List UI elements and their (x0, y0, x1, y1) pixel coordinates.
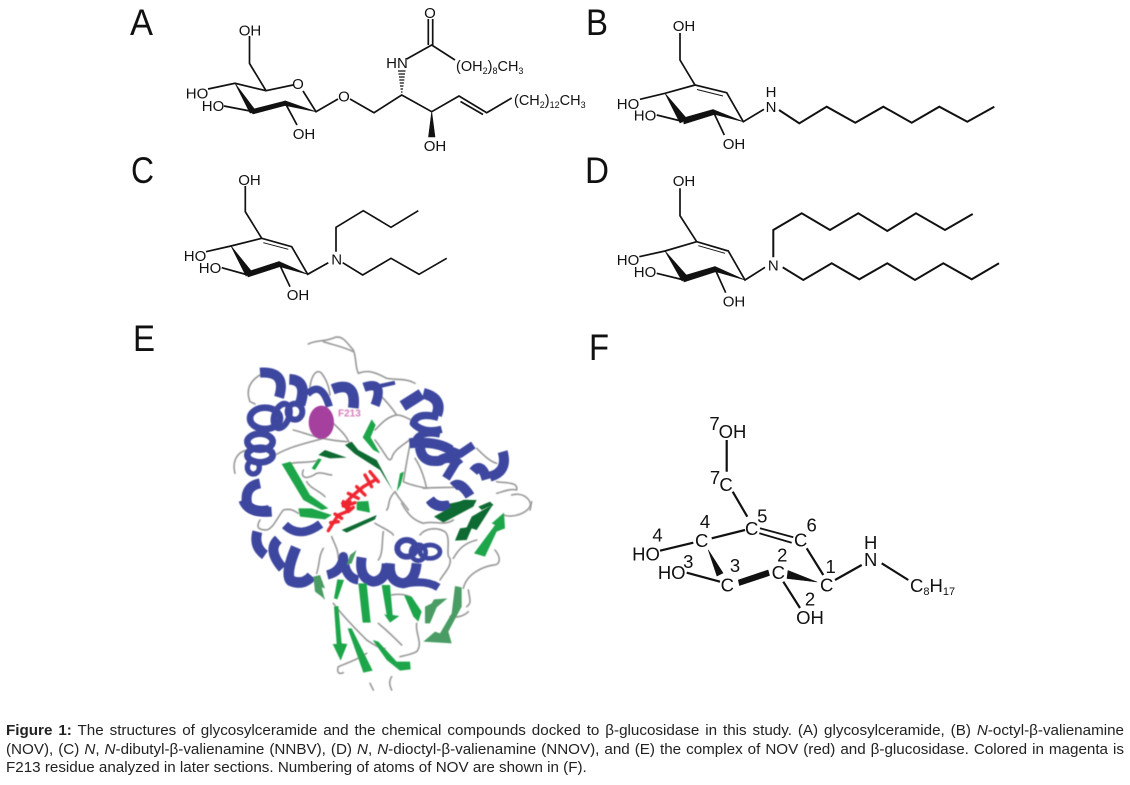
structure A atom labels: HO (202, 98, 224, 115)
structure D bonds (639, 188, 999, 293)
structure F atom labels and numbers: 7 (710, 467, 720, 488)
structure F atom labels and numbers: 2 (805, 588, 815, 610)
structure F atom labels and numbers: H (930, 575, 943, 596)
panel label A: A (130, 2, 153, 43)
panel label B: B (586, 2, 608, 43)
structure C atom labels: OH (238, 172, 261, 189)
panel label F: F (589, 327, 609, 368)
structure C atom labels (184, 172, 342, 304)
green strands, lower (298, 500, 505, 673)
structure F atom labels and numbers: 3 (730, 555, 740, 576)
structure A atom labels: (CH (514, 93, 540, 109)
structure C atom labels: HO (199, 260, 221, 277)
structure D atom labels: HO (617, 252, 639, 269)
structure B atom labels: HO (634, 108, 656, 124)
structure F bonds (660, 440, 908, 608)
structure C bonds (206, 186, 447, 287)
structure F atom labels and numbers: C (719, 474, 733, 495)
structure A atom labels: HO (186, 86, 208, 102)
structure F atom labels and numbers: 6 (807, 514, 817, 536)
structure A atom labels: HN (386, 55, 408, 72)
structure A atom labels: O (292, 76, 304, 93)
structure A atom labels: 3 (581, 100, 586, 110)
structure F atom labels and numbers: OH (796, 607, 824, 628)
structure A atom labels: O (424, 5, 436, 22)
panel E: complex of NOV and beta-glucosidase (133, 318, 532, 690)
structure F atom labels and numbers: HO (658, 562, 686, 583)
gray coils, lower (258, 502, 532, 690)
panel label C: C (131, 150, 154, 191)
structure A atom labels: 3 (518, 66, 523, 76)
protein ribbon, upper part (234, 337, 531, 511)
structure F atom labels and numbers: 5 (757, 506, 767, 526)
structure B atom labels: HO (617, 96, 639, 113)
panel label D: D (585, 150, 609, 191)
structure F atom labels and numbers (632, 413, 955, 628)
structure A atom labels: (OH (456, 59, 483, 75)
structure A atom labels: CH (560, 93, 581, 109)
structure C atom labels: OH (287, 287, 309, 304)
structure A atom labels: ) (488, 59, 492, 75)
panel A: glycosylceramide (130, 2, 586, 155)
structure A atom labels: OH (293, 126, 315, 143)
structure A atom labels: O (338, 88, 350, 106)
caption: F213 residue analyzed in later sections. Numbering of atoms of NOV are shown in (F). (6, 759, 587, 776)
panel C: N,N-dibutyl-beta-valienamine (131, 150, 447, 304)
structure F atom labels and numbers: C (910, 575, 923, 596)
structure F atom labels and numbers: 8 (923, 586, 930, 598)
structure F atom labels and numbers: H (864, 532, 877, 553)
caption: Figure 1: The structures of glycosylceramide and the chemical compounds docked to β-glucosidase in this study. (A) glycosylceramide, (B) N-octyl-β-valienamine (6, 722, 1124, 739)
green strands, upper (282, 419, 493, 510)
structure A atom labels: 12 (550, 100, 560, 110)
structure F atom labels and numbers: N (864, 549, 877, 570)
structure F atom labels and numbers: C (745, 518, 758, 539)
structure D atom labels (617, 173, 779, 310)
structure B atom labels: OH (723, 136, 745, 153)
magenta F213 residue (309, 406, 334, 439)
structure F atom labels and numbers: C (772, 562, 785, 583)
structure A atom labels: 8 (492, 66, 497, 76)
protein ribbon, lower part (243, 500, 532, 690)
structure F atom labels and numbers: 7 (709, 413, 720, 434)
structure F atom labels and numbers: C (721, 574, 734, 596)
structure C atom labels: HO (184, 248, 206, 265)
structure B bonds (640, 33, 994, 135)
structure F atom labels and numbers: 4 (652, 524, 663, 546)
structure D atom labels: OH (723, 294, 745, 310)
structure A atom labels: ) (545, 93, 550, 109)
structure A atom labels: 2 (483, 66, 488, 76)
structure F atom labels and numbers: OH (719, 421, 746, 442)
F213 residue label: F213 (338, 409, 361, 420)
structure F atom labels and numbers: 2 (777, 544, 787, 566)
structure F atom labels and numbers: 4 (700, 511, 710, 532)
structure D atom labels: OH (673, 173, 695, 190)
structure F atom labels and numbers: HO (632, 544, 660, 564)
structure D atom labels: HO (634, 264, 656, 281)
panel B: N-octyl-beta-valienamine (586, 2, 994, 153)
blue helices, lower (243, 500, 450, 587)
red ligand NOV, upper part (343, 472, 378, 508)
caption (6, 722, 1124, 776)
structure C atom labels: N (331, 252, 342, 268)
structure F atom labels and numbers: C (794, 530, 807, 550)
structure F atom labels and numbers: C (695, 530, 708, 551)
structure F atom labels and numbers: 3 (683, 551, 693, 572)
panel F: atom numbering of NOV (589, 327, 955, 628)
panel label E: E (133, 318, 155, 359)
structure B atom labels: H (766, 84, 776, 101)
structure A atom labels: 2 (540, 100, 545, 110)
structure B atom labels: OH (673, 18, 695, 35)
structure A atom labels: CH (497, 59, 518, 75)
structure F atom labels and numbers: C (820, 574, 833, 596)
structure A atom labels: OH (424, 138, 446, 155)
blue helices, upper (247, 373, 504, 511)
structure B atom labels (617, 18, 776, 153)
structure B atom labels: N (766, 99, 776, 116)
structure A bonds (208, 19, 512, 137)
gray coils, upper (234, 337, 531, 510)
structure A atom labels (186, 5, 586, 155)
structure D atom labels: N (768, 258, 779, 274)
structure A atom labels: OH (239, 22, 261, 40)
structure F atom labels and numbers: 17 (943, 586, 955, 598)
caption: (NOV), (C) N, N-dibutyl-β-valienamine (NNBV), (D) N, N-dioctyl-β-valienamine (NNOV), and (E) the complex of NOV (red) and β-glucosidase. Colored in magenta is (6, 741, 1124, 758)
red ligand NOV (328, 502, 355, 531)
panel D: N,N-dioctyl-beta-valienamine (585, 150, 999, 310)
structure F atom labels and numbers: 1 (826, 556, 836, 577)
